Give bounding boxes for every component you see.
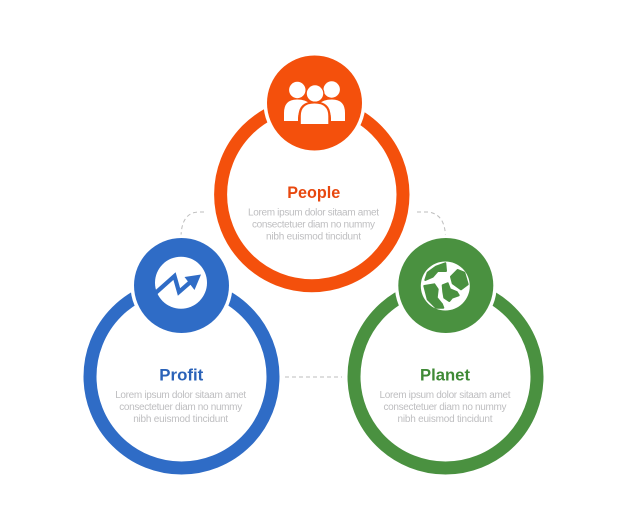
connector: profit to planet — [285, 376, 342, 378]
panel: people — [221, 52, 403, 286]
text block: profit: consectetuer diam no nummy — [119, 402, 242, 413]
ring: planet — [354, 285, 537, 468]
text block: profit: Lorem ipsum dolor sitaam amet — [115, 390, 246, 401]
connector: people to planet — [417, 212, 446, 238]
icon badge: planet — [395, 234, 497, 336]
icon badge: people — [264, 52, 366, 154]
panel: profit — [90, 234, 273, 468]
heading: planet: Planet — [420, 366, 470, 384]
text block: profit — [115, 390, 246, 425]
icon badge: profit — [130, 234, 232, 336]
text block: people: Lorem ipsum dolor sitaam amet — [248, 208, 379, 218]
text block: planet — [380, 390, 511, 425]
ring: profit — [90, 285, 273, 468]
text block: people — [248, 208, 379, 242]
ring: people — [221, 103, 403, 286]
text block: people: consectetuer diam no nummy — [252, 220, 375, 230]
heading: profit: Profit — [159, 366, 204, 384]
text block: planet: nibh euismod tincidunt — [398, 414, 493, 425]
heading: people: People — [287, 183, 340, 202]
connector: people to profit — [181, 212, 204, 238]
panel: planet — [354, 234, 537, 468]
text block: profit: nibh euismod tincidunt — [133, 414, 228, 425]
text block: people: nibh euismod tincidunt — [266, 232, 361, 242]
text block: planet: Lorem ipsum dolor sitaam amet — [380, 390, 511, 401]
text block: planet: consectetuer diam no nummy — [384, 402, 506, 413]
